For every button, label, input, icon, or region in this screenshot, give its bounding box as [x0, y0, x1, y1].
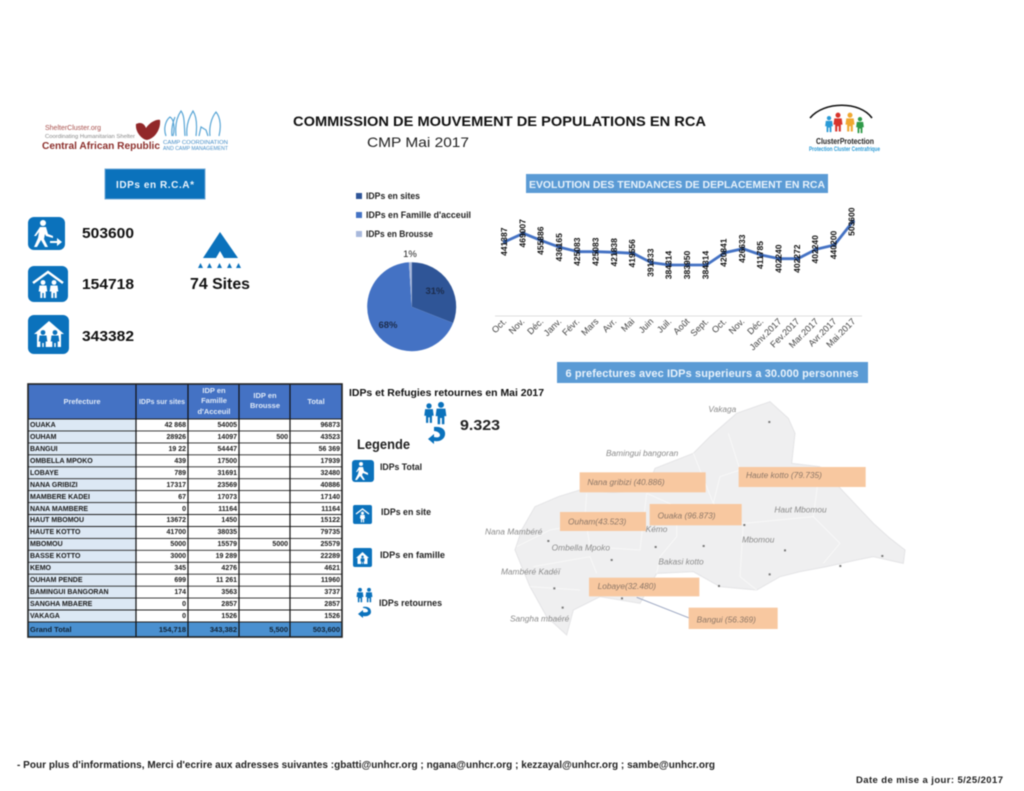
data labels [499, 207, 857, 279]
table rows: 25579 [321, 541, 340, 548]
pie chart: 31% [425, 286, 445, 297]
pie legend [356, 191, 471, 239]
table rows: 500 [276, 434, 288, 441]
data labels: 391333 [645, 248, 655, 277]
data labels: 402272 [792, 244, 802, 273]
time axis labels: Mai.2017 [824, 316, 857, 350]
table rows: 11164 [321, 506, 340, 513]
table total row: 343,382 [210, 625, 237, 634]
heading: IDPs en RCA [105, 169, 205, 199]
heading: trend chart [526, 174, 828, 193]
prefecture names: Sangha mbaéré [510, 613, 570, 623]
logo: Cluster Protection: Protection Cluster Centrafrique [809, 147, 881, 153]
table header: Prefecture [63, 397, 101, 406]
prefecture names: Vakaga [708, 404, 737, 414]
table rows: 23569 [218, 482, 237, 489]
data labels: 384314 [700, 251, 710, 279]
table rows: 28926 [167, 434, 186, 441]
table rows: 699 [174, 577, 186, 584]
data labels: 469007 [517, 219, 527, 247]
table rows: 96873 [321, 422, 340, 429]
table rows: 13672 [167, 517, 186, 524]
table rows: 56 369 [319, 446, 340, 453]
table total row [30, 625, 340, 634]
callouts: Haute kotto (79.735) [746, 470, 822, 480]
table rows: 14097 [218, 434, 237, 441]
time axis labels: Mai [619, 316, 636, 334]
time axis labels: Avr.2017 [806, 316, 838, 348]
time axis labels: Juin [637, 316, 655, 335]
table rows: 17500 [218, 458, 237, 465]
time axis labels: Mar.2017 [787, 316, 820, 350]
legend item: family [353, 548, 445, 567]
stat: IDPs en famille: 343382 [82, 328, 134, 345]
legend item: total: IDPs Total [380, 462, 422, 472]
table rows: 19 289 [216, 553, 237, 560]
table rows: 32480 [321, 470, 340, 477]
prefecture names: Kémo [646, 524, 668, 534]
table rows: 0 [182, 601, 186, 608]
data labels: 411785 [755, 241, 765, 269]
title: COMMISSION DE MOUVEMENT DE POPULATIONS EN RCA [293, 113, 706, 129]
table rows: 15122 [321, 517, 340, 524]
time axis labels: Août [671, 316, 692, 337]
table rows: OUHAM [30, 434, 57, 441]
prefecture names: Bamingui bangoran [606, 448, 679, 458]
table header: Brousse [250, 401, 280, 410]
data labels: 421838 [609, 238, 619, 266]
time axis labels: Févr. [560, 316, 581, 338]
table rows: MBOMOU [30, 541, 63, 548]
stat: IDPs en site: 154718 [82, 276, 134, 293]
table header: IDP en [202, 386, 226, 395]
time axis labels: Déc. [745, 316, 765, 337]
table rows: 1526 [221, 613, 237, 620]
table rows: 42 868 [165, 422, 186, 429]
table rows: 1450 [221, 517, 237, 524]
table rows: 17939 [321, 458, 340, 465]
logo: Shelter Cluster and CCCM: Coordinating Humanitarian Shelter [45, 134, 135, 140]
prefecture names: Mbomou [742, 535, 775, 545]
table rows: 67 [178, 494, 186, 501]
time axis labels: Nov. [507, 316, 526, 336]
time axis labels: Oct. [490, 316, 508, 335]
data labels: 441387 [499, 227, 509, 256]
table header: Total [307, 397, 325, 406]
data labels: 384314 [664, 251, 674, 279]
icon: IDPs en famille [28, 315, 69, 354]
time axis labels: Janv.2017 [747, 316, 783, 352]
logo: Cluster Protection [809, 105, 881, 153]
pie legend: IDPs en sites [366, 191, 420, 201]
time axis labels: Oct. [710, 316, 728, 335]
table rows: 0 [182, 613, 186, 620]
table rows: 0 [182, 506, 186, 513]
table header: IDP en [253, 391, 277, 400]
time axis labels: Juil. [655, 316, 673, 335]
data labels: 425083 [590, 237, 600, 266]
heading: trend chart: EVOLUTION DES TENDANCES DE DEPLACEMENT EN RCA [529, 179, 825, 191]
town markers [547, 421, 883, 609]
table rows: NANA GRIBIZI [30, 482, 78, 489]
table header: IDPs sur sites [139, 397, 185, 406]
table rows: 3563 [221, 589, 237, 596]
table rows: 41700 [167, 529, 186, 536]
table rows: 38035 [218, 529, 237, 536]
prefecture names [485, 404, 827, 623]
data labels: 419556 [627, 239, 637, 267]
table rows: 5000 [170, 541, 186, 548]
logo: Cluster Protection: ClusterProtection [816, 137, 874, 146]
table rows: HAUTE KOTTO [30, 529, 81, 536]
data labels: 440200 [828, 231, 838, 259]
table rows: 31691 [218, 470, 237, 477]
time axis labels: Sept. [688, 316, 710, 338]
logo: Shelter Cluster and CCCM: ShelterCluster.org [45, 125, 101, 132]
table rows: 11164 [218, 506, 237, 513]
logo: Shelter Cluster and CCCM: Central African Republic [42, 140, 160, 152]
table rows: 439 [174, 458, 186, 465]
callouts: Ouaka (96.873) [658, 510, 716, 520]
icon: tent and sites [198, 232, 241, 268]
data labels: 455886 [536, 226, 546, 255]
icon: IDPs en site [28, 266, 68, 302]
pie chart [367, 249, 456, 351]
time axis labels: Mars [579, 316, 601, 338]
table rows: LOBAYE [30, 470, 59, 477]
logo: Shelter Cluster and CCCM [42, 111, 229, 152]
pie chart: 68% [378, 320, 398, 331]
footer: update date: Date de mise a jour: 5/25/2017 [856, 775, 1003, 786]
table rows: 2857 [324, 601, 340, 608]
prefecture names: Bakasi kotto [658, 557, 704, 567]
pie legend: IDPs en Brousse [366, 229, 433, 239]
table total row: 154,718 [159, 625, 186, 634]
prefecture names: Nana Mambéré [485, 527, 543, 537]
table rows: 4621 [324, 565, 340, 572]
table rows: 22289 [321, 553, 340, 560]
icon: IDPs total [28, 217, 65, 250]
table rows: OUAKA [30, 422, 56, 429]
time axis labels: Déc. [525, 316, 545, 337]
table rows [30, 422, 340, 620]
table rows: OUHAM PENDE [30, 577, 83, 584]
table rows: BAMINGUI BANGORAN [30, 589, 109, 596]
time axis labels: Avr. [600, 316, 618, 334]
legend: Legende [357, 436, 410, 452]
table rows: 3737 [324, 589, 340, 596]
time axis labels [490, 316, 857, 352]
table rows: 40886 [321, 482, 340, 489]
legend [352, 436, 445, 618]
table: IDPs per prefecture [28, 384, 342, 637]
table rows: 3000 [170, 553, 186, 560]
heading: IDPs en RCA: IDPs en R.C.A* [116, 180, 194, 191]
callouts: Nana gribizi (40.886) [587, 477, 665, 487]
legend item: returnees: IDPs retournes [379, 598, 442, 608]
data labels: 426633 [737, 234, 747, 263]
prefecture names: Haut Mbomou [774, 505, 827, 515]
table rows: 4276 [221, 565, 237, 572]
table total row: 5,500 [269, 625, 288, 634]
time axis labels: Janv. [542, 316, 563, 338]
stat: number of sites: 74 Sites [190, 276, 250, 293]
heading: returnees: IDPs et Refugies retournes en Mai 2017 [349, 388, 544, 399]
prefecture borders [517, 433, 840, 590]
icon: returnees [424, 402, 446, 444]
table rows: 54005 [218, 422, 237, 429]
logo: Shelter Cluster and CCCM: CAMP COORDINATION [163, 140, 228, 146]
time axis labels: Fev.2017 [768, 316, 801, 349]
data labels: 425083 [572, 237, 582, 266]
callouts: Bangui (56.369) [697, 615, 756, 625]
table header: Famille [201, 396, 227, 405]
table rows: SANGHA MBAERE [30, 601, 93, 608]
prefecture names: Mambéré Kadéï [501, 566, 561, 576]
table total row: 503,600 [313, 625, 340, 634]
table rows: 5000 [272, 541, 288, 548]
table rows: 17073 [218, 494, 237, 501]
data labels: 383950 [682, 251, 692, 279]
table rows: 11 261 [216, 577, 237, 584]
data labels: 402240 [810, 235, 820, 263]
data labels: 402240 [774, 244, 784, 273]
pie chart: 1% [403, 249, 417, 260]
callouts [560, 467, 866, 629]
legend item: total [352, 460, 422, 482]
callouts: Ouham(43.523) [568, 516, 627, 526]
legend item: family: IDPs en famille [380, 550, 445, 560]
table total row: Grand Total [30, 625, 72, 634]
callouts: Lobaye(32.480) [598, 581, 656, 591]
table rows: HAUT MBOMOU [30, 517, 84, 524]
data labels: 436165 [554, 233, 564, 261]
table header [63, 386, 325, 416]
table header: d'Acceuil [197, 407, 231, 416]
table rows: 15579 [218, 541, 237, 548]
table rows: 11960 [321, 577, 340, 584]
table rows: VAKAGA [30, 613, 60, 620]
table rows: MAMBERE KADEI [30, 494, 90, 501]
table rows: 43523 [321, 434, 340, 441]
title [293, 113, 706, 150]
data labels: 420841 [719, 238, 729, 267]
table rows: 2857 [221, 601, 237, 608]
legend item: site [353, 505, 431, 524]
logo: Shelter Cluster and CCCM: AND CAMP MANAGEMENT [163, 146, 229, 152]
table rows: BASSE KOTTO [30, 553, 81, 560]
table rows: 789 [174, 470, 186, 477]
legend item: returnees [357, 588, 442, 618]
data labels: 503600 [847, 207, 857, 236]
stat: returnees: 9.323 [460, 417, 500, 434]
footer: contact: - Pour plus d'informations, Merci d'ecrire aux adresses suivantes :gbatti@unhcr.org ; ngana@unhcr.org ; kezzayal@unhcr.org ; sambe@unhcr.org [17, 760, 715, 771]
table rows: 17140 [321, 494, 340, 501]
legend item: site: IDPs en site [381, 507, 431, 517]
heading: prefectures: 6 prefectures avec IDPs superieurs a 30.000 personnes [566, 368, 858, 380]
stat: IDPs total: 503600 [82, 225, 134, 242]
table rows: 19 22 [168, 446, 186, 453]
pie legend: IDPs en Famille d'acceuil [366, 210, 471, 220]
table rows: BANGUI [30, 446, 58, 453]
heading: prefectures [557, 362, 868, 383]
table rows: 345 [174, 565, 186, 572]
title: CMP Mai 2017 [367, 134, 469, 150]
time axis labels: Nov. [727, 316, 746, 336]
table rows: KEMO [30, 565, 52, 572]
table rows: NANA MAMBERE [30, 506, 88, 513]
table rows: 17317 [167, 482, 186, 489]
map: Central African Republic [485, 402, 905, 635]
table rows: 79735 [321, 529, 340, 536]
table rows: 1526 [324, 613, 340, 620]
line chart: displacement trend [490, 207, 862, 352]
table rows: 174 [174, 589, 186, 596]
table rows: 54447 [218, 446, 237, 453]
prefecture names: Ombella Mpoko [552, 542, 610, 552]
table rows: OMBELLA MPOKO [30, 458, 93, 465]
